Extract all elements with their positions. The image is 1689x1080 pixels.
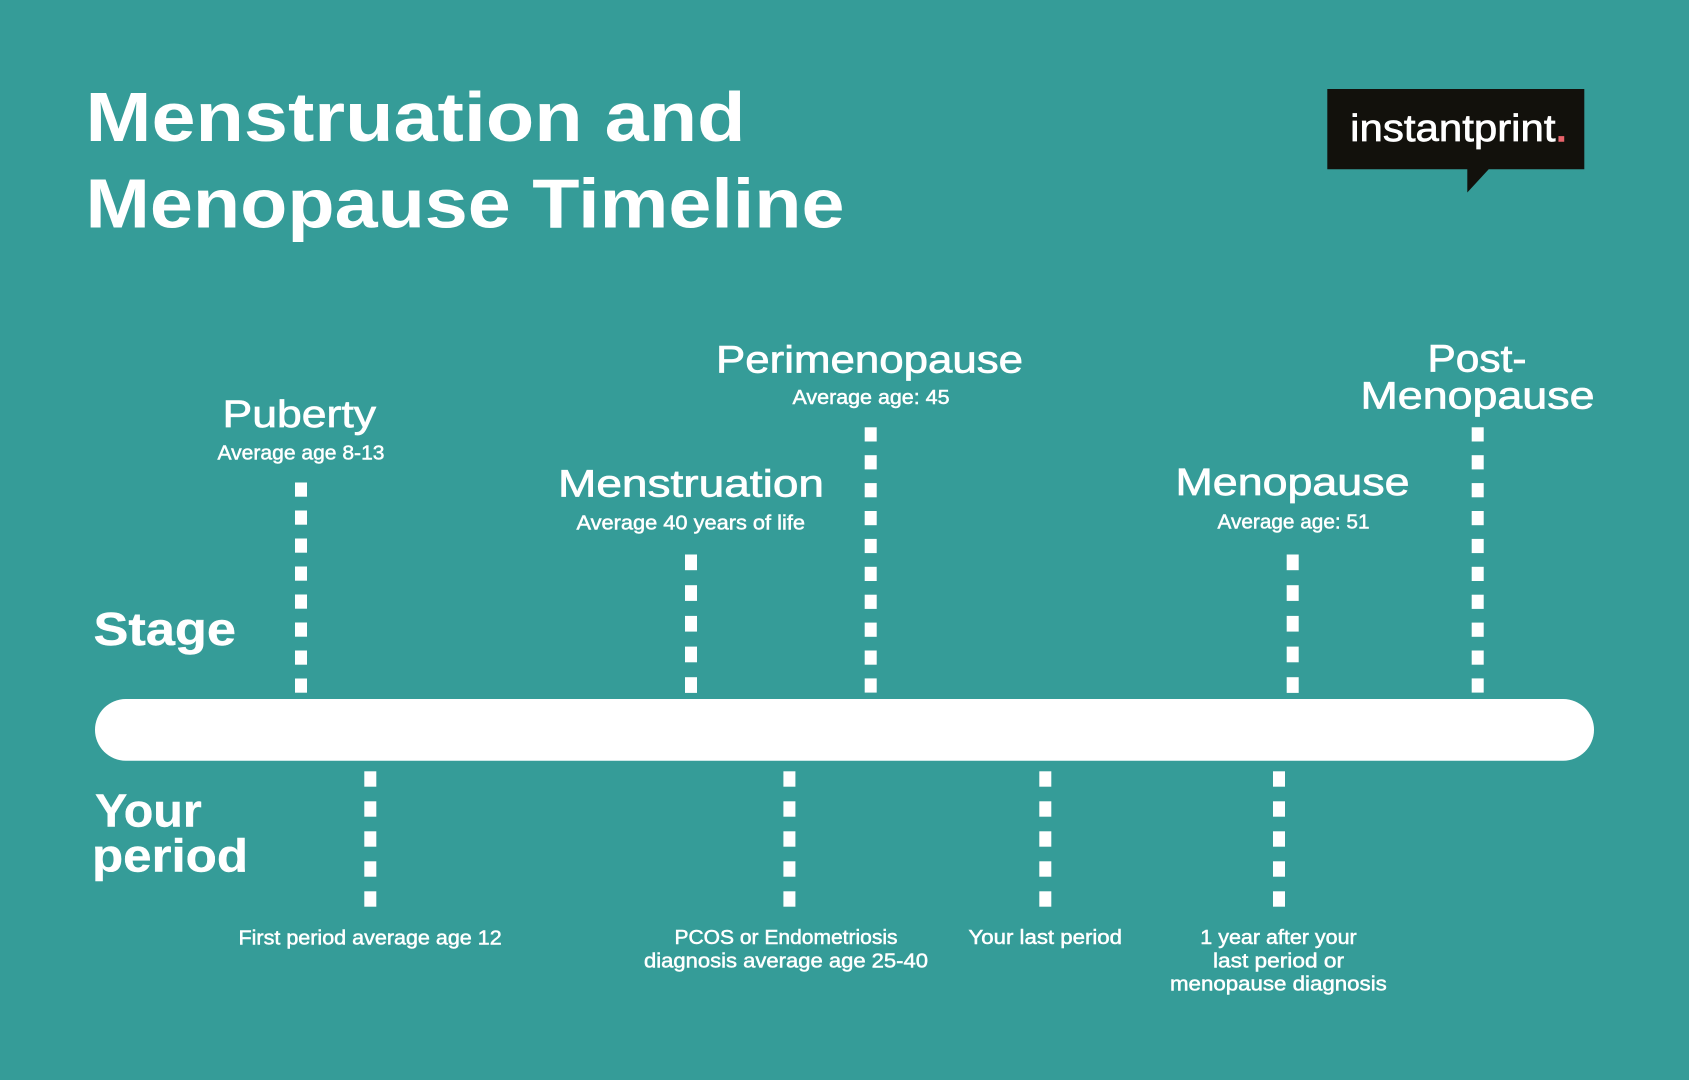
PCOS caption: PCOS or Endometriosis <box>674 927 898 949</box>
one year after caption: last period or <box>1213 950 1344 972</box>
row label: Your period: period <box>92 829 248 881</box>
Perimenopause heading: Perimenopause <box>716 339 1023 381</box>
row label: Stage: Stage <box>94 603 236 655</box>
period event: PCOS or Endometriosis diagnosis <box>644 771 928 972</box>
stage: Menopause <box>1176 462 1410 693</box>
Menstruation dashed connector <box>685 554 697 693</box>
first period dashed connector <box>364 771 376 907</box>
PCOS caption <box>644 927 928 972</box>
PCOS dashed connector <box>783 771 795 907</box>
Menopause dashed connector <box>1287 554 1299 693</box>
Post-Menopause heading: Post- <box>1428 338 1526 380</box>
period event: one year after last period <box>1170 771 1387 996</box>
logo: instantprint speech bubble: instantprint . <box>1350 108 1567 150</box>
one year after caption: 1 year after your <box>1200 927 1357 949</box>
timeline bar <box>95 699 1594 761</box>
stage: Menstruation <box>558 464 824 693</box>
Perimenopause average age: Average age: 45 <box>792 387 950 409</box>
row label: Your period <box>92 785 248 881</box>
title: Menopause Timeline <box>86 164 844 242</box>
first period caption: First period average age 12 <box>238 927 502 949</box>
period event: first period <box>238 771 502 949</box>
last period caption: Your last period <box>968 927 1122 949</box>
PCOS caption: diagnosis average age 25-40 <box>644 950 928 972</box>
one year after caption <box>1170 927 1387 996</box>
logo: instantprint speech bubble <box>1327 89 1584 192</box>
Puberty average age: Average age 8-13 <box>218 442 384 464</box>
period event: your last period <box>968 771 1122 949</box>
Post-Menopause dashed connector <box>1472 427 1484 693</box>
Post-Menopause heading: Menopause <box>1360 376 1594 418</box>
stage: Post-Menopause <box>1360 338 1594 693</box>
Puberty dashed connector <box>295 482 307 693</box>
stage: Perimenopause <box>716 339 1023 693</box>
row label: Your period: Your <box>95 785 202 837</box>
Perimenopause dashed connector <box>865 427 877 693</box>
one year after dashed connector <box>1273 771 1285 907</box>
Menopause average age: Average age: 51 <box>1218 511 1370 533</box>
Menstruation heading: Menstruation <box>558 464 824 506</box>
Puberty heading: Puberty <box>222 394 376 436</box>
one year after caption: menopause diagnosis <box>1170 974 1387 996</box>
stage: Puberty <box>218 394 384 693</box>
title <box>86 78 844 242</box>
Menopause heading: Menopause <box>1176 462 1410 504</box>
Post-Menopause heading <box>1360 338 1594 418</box>
Menstruation duration: Average 40 years of life <box>576 512 805 534</box>
title: Menstruation and <box>86 78 746 156</box>
last period dashed connector <box>1039 771 1051 907</box>
